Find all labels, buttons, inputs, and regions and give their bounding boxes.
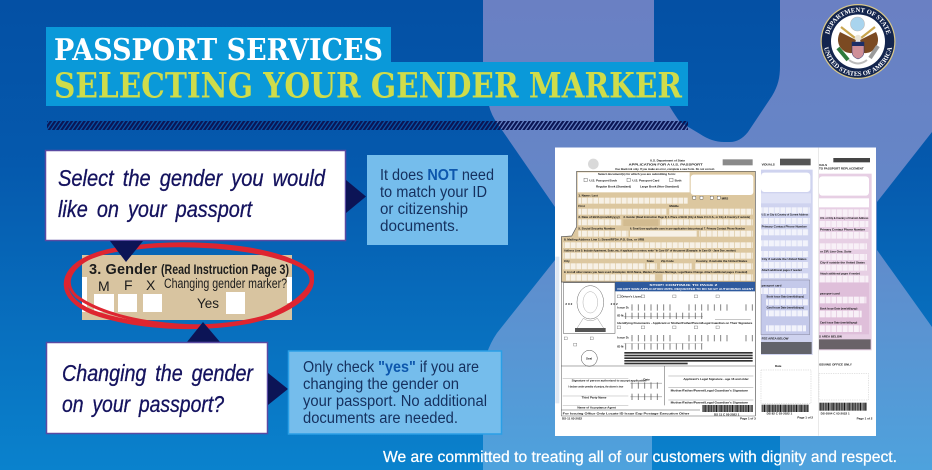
- gender form excerpt with red circle: Changing gender marker?: [164, 276, 287, 291]
- page 2 lavender: Book Issue Date (mm/dd/yyyy): [767, 295, 804, 299]
- page 1 tan: Large Book (Non-Standard): [640, 184, 679, 188]
- panel: select the gender: [46, 150, 346, 240]
- page 2 lavender: VIDUALS: [762, 163, 775, 167]
- page 2 lavender: passport card: [762, 284, 782, 288]
- gender form excerpt with red circle: X: [146, 277, 156, 293]
- page 3 pink: Book Issue Date (mm/dd/yyyy): [820, 306, 857, 310]
- page 3 pink: Attach additional pages if needed: [820, 271, 860, 275]
- page 2 lavender: DS 82 C 03-2022 1: [767, 412, 793, 416]
- footer statement: We are committed to treating all of our customers with dignity and respect.: [383, 449, 897, 466]
- callout: does not need to match: or citizenship: [380, 201, 468, 218]
- page 3 pink: Card Issue Date (mm/dd/yyyy): [820, 321, 857, 325]
- gender form excerpt with red circle: [66, 245, 312, 327]
- icon: department of state seal: DEPARTMENT OF STATE: [825, 8, 891, 35]
- page 1 tan: Address Line 2: Include Apartment, Suite, etc. if applicant is a minor, write "In Care Of" of the parent (Example: In Care Of - Jane Doe, mother): [564, 248, 736, 252]
- page 1 tan: Identifying Documents - Applicant or Mother/Father/Parent/Legal Guardian on Their Signature: [617, 321, 753, 325]
- page 1 tan: Mother/Father/Parent/Legal Guardian's Signature: [671, 400, 748, 404]
- page 1 tan: 8. Mailing Address Line 1: Street/RFD#, P.O. Box, or URB: [564, 238, 645, 242]
- arrow: right to note two: [268, 373, 288, 405]
- callout: does not need to match: documents.: [380, 218, 459, 235]
- hatched divider stripe: [47, 121, 688, 130]
- page 2 lavender: City if outside the United States: [762, 257, 807, 261]
- title: [46, 27, 688, 106]
- page 1 tan: Both: [675, 178, 682, 182]
- icon: department of state seal: UNITED STATES OF AMERICA: [824, 46, 892, 76]
- page 1 tan: City: [564, 259, 570, 263]
- panel: changing the gender: [46, 342, 268, 434]
- callout: only check yes: changing the gender on: [303, 376, 459, 393]
- page 1 tan: Regular Book (Standard): [596, 184, 631, 188]
- callout: only check yes: [288, 351, 502, 434]
- page 2 lavender: [761, 159, 813, 420]
- page 1 tan: MRS: [722, 196, 728, 200]
- callout: does not need to match: to match your ID: [380, 184, 487, 201]
- page 1 tan: ID No.: [617, 345, 626, 349]
- page 1 tan: Use black ink only. If you make an error, complete a new form. Do not correct.: [615, 167, 715, 171]
- page 1 tan: 2 X 2: [565, 302, 573, 306]
- page 1 tan: Issue Date: [617, 305, 633, 309]
- page 1 tan: DS 11 C 03-2022 1: [714, 413, 740, 417]
- page 1 tan: U.S. Passport Card: [632, 178, 660, 182]
- title: SELECTING YOUR GENDER MARKER: [54, 66, 683, 106]
- page 1 tan: Zip Code: [661, 259, 674, 263]
- page 2 lavender: Primary Contact Phone Number: [762, 224, 808, 228]
- page 3 pink: DS-5504 C 03-2022 1: [821, 412, 850, 416]
- panel: changing the gender: Changing the gender: [62, 360, 254, 386]
- page 3 pink: TO PASSPORT REPLACEMENT: [819, 166, 864, 170]
- page 1 tan: U.S. Department of State: [650, 158, 685, 162]
- page 1 tan: Country, if outside the United States: [696, 259, 748, 263]
- page 1 tan: 6. Email (see applicable uses in pre-application data privacy) 7. Primary Contact Phone Number: [630, 226, 746, 230]
- passport application form image: [555, 147, 876, 436]
- gender form excerpt with red circle: Yes: [197, 296, 219, 311]
- title: PASSPORT SERVICES: [54, 33, 383, 68]
- callout: only check yes: Only check "yes" if you are: [303, 359, 479, 376]
- page 1 tan: Page 1 of 3: [740, 417, 756, 421]
- page 1 tan: 2. Date of Birth (mm/dd/yyyy): [578, 215, 620, 219]
- page 1 tan: APPLICATION FOR A U.S. PASSPORT: [629, 163, 703, 167]
- page 1 tan: [555, 158, 756, 421]
- page 3 pink: [819, 158, 873, 420]
- page 3 pink: ISSUING OFFICE ONLY: [819, 363, 852, 367]
- page 1 tan: 9. List all other names you have used. (Examples: Birth Name, Maiden, Previous Marriage, Legal Name Change. Attach additional pages if needed): [564, 270, 747, 274]
- page 1 tan: 2 X 2: [611, 302, 618, 306]
- page 1 tan: STOP! CONTINUE TO PAGE 2: [649, 283, 718, 287]
- gender form excerpt with red circle: M: [98, 278, 110, 294]
- page 3 pink: passport card: [820, 292, 840, 296]
- page 2 lavender: Card Issue Date (mm/dd/yyyy): [767, 306, 804, 310]
- page 3 pink: City if outside the United States: [820, 260, 865, 264]
- page 1 tan: First: [578, 204, 585, 208]
- page 3 pink: Page 1 of 2: [857, 416, 873, 420]
- page 1 tan: Seal: [586, 356, 592, 360]
- icon: department of state seal: [820, 4, 896, 79]
- page 3 pink: or ZIP, Line One, Suite: [820, 249, 852, 253]
- gender form excerpt with red circle: 3. Gender: [89, 262, 157, 278]
- page 1 tan: State: [647, 259, 654, 263]
- gender form excerpt with red circle: F: [124, 277, 133, 293]
- panel: changing the gender: on your passport?: [62, 391, 224, 417]
- page 1 tan: Issue Date: [617, 336, 633, 340]
- callout: only check yes: your passport. No additional: [303, 393, 487, 410]
- panel: select the gender: Select the gender you would: [58, 165, 326, 191]
- callout: only check yes: documents are needed.: [303, 410, 458, 427]
- page 1 tan: Middle: [669, 204, 679, 208]
- page 1 tan: ID No.: [617, 314, 626, 318]
- page 3 pink: S AREA BELOW: [819, 334, 842, 338]
- photo box: [563, 283, 615, 333]
- page 1 tan: I declare under penalty of perjury, the above is true: [568, 384, 624, 388]
- page 1 tan: U.S. Passport Book: [589, 178, 617, 182]
- page 2 lavender: Attach additional pages if needed: [762, 268, 802, 272]
- callout: does not need to match: [367, 155, 508, 245]
- callout: does not need to match: It does NOT need: [380, 167, 494, 184]
- identification rows: Driver's License: [621, 295, 645, 299]
- page 1 tan: 5. Social Security Number: [578, 226, 616, 230]
- oath text: [624, 352, 753, 364]
- page 3 pink: UALS: [819, 163, 827, 167]
- page 1 tan: Date: [643, 378, 650, 382]
- page 1 tan: Select document(s) for which you are submitting form:: [598, 172, 676, 176]
- page 2 lavender: Page 1 of 2: [797, 416, 813, 420]
- page 1 tan: For Issuing Office Only Locate ID Issue Exp Postage Execution Other: [563, 411, 690, 415]
- page 3 pink: U.S. or City & Country of Current Address: [820, 216, 869, 220]
- panel: select the gender: like on your passport: [58, 196, 253, 222]
- page 1 tan: Name of Acceptance Agent: [577, 405, 616, 409]
- red hand-drawn circle: [66, 245, 312, 327]
- page 1 tan: DS-11 03-2022: [562, 417, 582, 421]
- page 1 tan: Signature of person authorized to accept application: [572, 379, 646, 383]
- arrow: up to form: [187, 322, 220, 342]
- page 3 pink: Primary Contact Phone Number: [820, 227, 866, 231]
- page 1 tan: 3. Gender (Read Instruction Page 3) 4. Place of Birth (City & State if in U.S., or City & Country if outside): [623, 215, 750, 219]
- arrow: down to form: [110, 241, 143, 262]
- page 2 lavender: FEE AREA BELOW: [762, 336, 789, 340]
- page 2 lavender: U.S. or City & Country of Current Address: [762, 212, 809, 216]
- page 1 tan: 1. Name: Last: [578, 193, 598, 197]
- page 1 tan: DO NOT SIGN APPLICATION UNTIL REQUESTED TO DO SO BY AUTHORIZED AGENT: [617, 287, 754, 291]
- arrow: right to note one: [346, 180, 366, 213]
- stop band: [615, 282, 755, 291]
- tan form field: [82, 255, 292, 320]
- page 2 lavender: Date: [775, 364, 782, 368]
- gender form excerpt with red circle: (Read Instruction Page 3): [161, 261, 289, 277]
- page 1 tan: Third Party Name: [582, 396, 607, 400]
- page 1 tan: Applicant's Legal Signature - age 16 and older: [683, 377, 750, 381]
- page 1 tan: Mother/Father/Parent/Legal Guardian's Signature: [671, 388, 748, 392]
